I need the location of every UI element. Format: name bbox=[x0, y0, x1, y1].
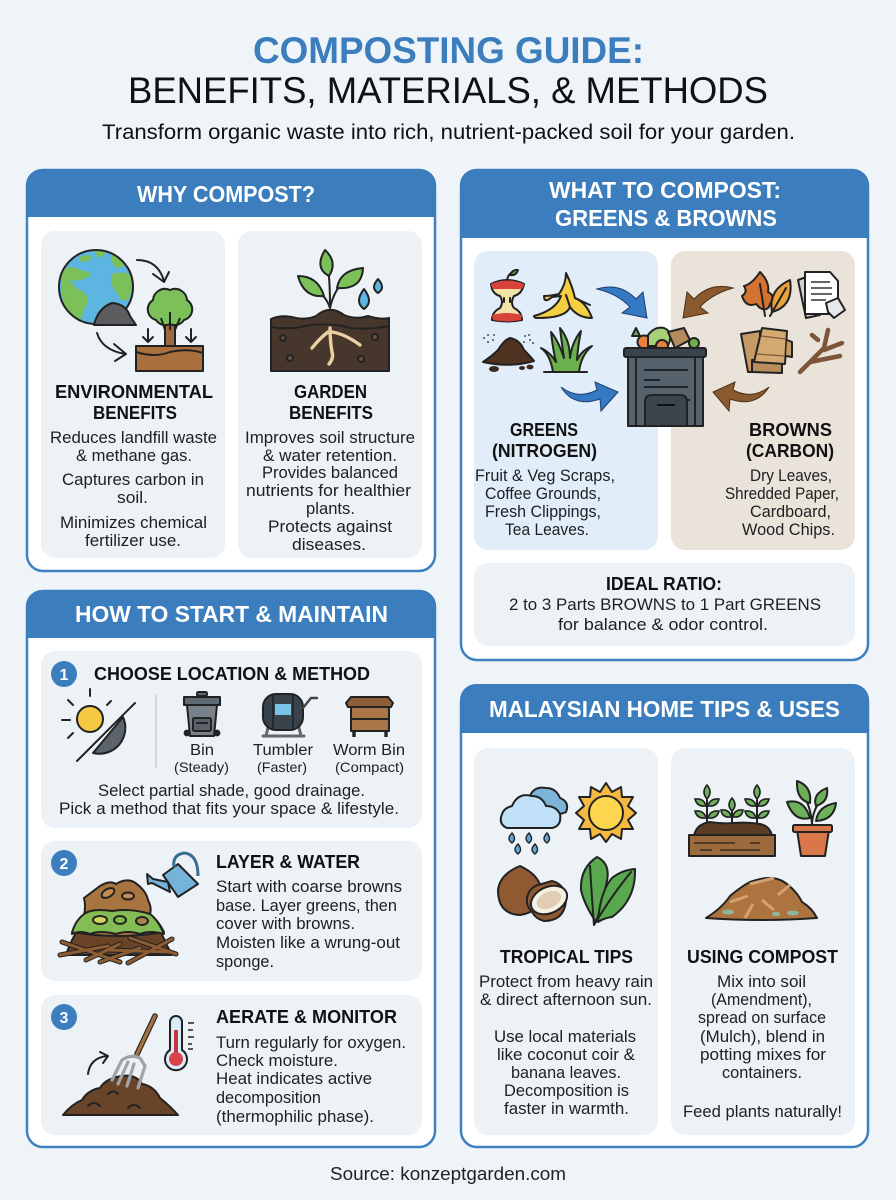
text: browns: BROWNS bbox=[749, 420, 832, 440]
text: using compost: USING COMPOST bbox=[687, 947, 838, 967]
heading: how to start bbox=[26, 590, 436, 638]
card: environmental benefits bbox=[41, 231, 225, 558]
heading: step 2: LAYER & WATER bbox=[216, 852, 360, 872]
text: browns bbox=[725, 420, 839, 539]
text: step 1: Select partial shade, good drainage. bbox=[98, 782, 365, 800]
text: tropical: Use local materials bbox=[494, 1028, 636, 1046]
text: garden list: diseases. bbox=[292, 536, 366, 554]
card: using compost bbox=[671, 748, 855, 1135]
text: browns: (CARBON) bbox=[746, 441, 834, 461]
text: greens: Coffee Grounds, bbox=[485, 485, 601, 503]
callout: ideal ratio bbox=[474, 563, 855, 646]
text: using compost: (Amendment), bbox=[711, 991, 812, 1009]
icon: apple core bbox=[491, 270, 524, 322]
title bbox=[128, 30, 768, 111]
icon: shredded paper bbox=[798, 272, 845, 318]
text: greens bbox=[475, 420, 615, 539]
panel: malaysian home tips bbox=[460, 684, 869, 1147]
text: using compost bbox=[683, 947, 842, 1121]
text: step 3: decomposition bbox=[216, 1089, 321, 1107]
text: step 3: Check moisture. bbox=[216, 1052, 338, 1070]
text: tropical: faster in warmth. bbox=[504, 1100, 629, 1118]
icon: seedling in soil bbox=[271, 250, 389, 371]
panel: what to compost bbox=[460, 169, 869, 660]
text: tropical: & direct afternoon sun. bbox=[480, 991, 652, 1009]
text: greens: GREENS bbox=[510, 420, 578, 440]
text: browns: Wood Chips. bbox=[742, 521, 835, 539]
card: browns bbox=[671, 251, 855, 550]
arrow: greens bottom bbox=[561, 382, 618, 411]
text: browns: Dry Leaves, bbox=[750, 467, 832, 485]
text: step 3: Heat indicates active bbox=[216, 1070, 372, 1088]
icon: tumbler bbox=[263, 694, 317, 736]
text: step 3 bbox=[216, 1034, 406, 1126]
text: greens: Fresh Clippings, bbox=[485, 503, 601, 521]
icon: thermometer bbox=[165, 1016, 194, 1070]
text: garden list: Provides balanced bbox=[262, 464, 398, 482]
arrow: greens top bbox=[597, 287, 647, 318]
text: step 2: Moisten like a wrung-out bbox=[216, 934, 400, 952]
heading: garden benefits bbox=[289, 382, 373, 423]
icon: pitchfork in compost bbox=[63, 1016, 178, 1115]
icon: potted plant bbox=[787, 781, 836, 856]
source line: Source: konzeptgarden.com bbox=[330, 1164, 566, 1184]
heading line: BENEFITS bbox=[93, 403, 177, 423]
heading: what to compost bbox=[460, 169, 869, 238]
text: using compost: Mix into soil bbox=[717, 973, 806, 991]
title: COMPOSTING GUIDE: bbox=[253, 30, 644, 71]
icon: bin bbox=[184, 692, 220, 736]
title: BENEFITS, MATERIALS, & METHODS bbox=[128, 70, 768, 111]
text: step 2: Start with coarse browns bbox=[216, 878, 402, 896]
text: garden list bbox=[245, 429, 415, 554]
badge 2 bbox=[51, 850, 77, 876]
heading: how to start: HOW TO START & MAINTAIN bbox=[75, 601, 388, 627]
text: greens: Tea Leaves. bbox=[505, 521, 589, 539]
heading: malaysian tips bbox=[460, 684, 869, 733]
text: step 1 bbox=[59, 782, 399, 818]
text: tropical: Decomposition is bbox=[504, 1082, 629, 1100]
heading: garden benefits: GARDEN bbox=[294, 382, 367, 402]
text: garden list: Improves soil structure bbox=[245, 429, 415, 447]
text: step 3: Turn regularly for oxygen. bbox=[216, 1034, 406, 1052]
text: garden list: & water retention. bbox=[263, 447, 397, 465]
labels: methods: Tumbler bbox=[253, 742, 313, 759]
labels: methods: (Compact) bbox=[335, 759, 404, 775]
panel: why compost bbox=[26, 169, 436, 571]
subtitle: Transform organic waste into rich, nutrient-packed soil for your garden. bbox=[102, 121, 795, 144]
text: browns: Cardboard, bbox=[750, 503, 831, 521]
icon: earth, tree and soil bbox=[59, 250, 203, 371]
text: garden list: Protects against bbox=[268, 518, 392, 536]
icon: grass bbox=[541, 328, 592, 372]
icon: layered compost pile bbox=[60, 880, 176, 963]
labels: methods: Bin bbox=[190, 742, 214, 759]
text: using compost: (Mulch), blend in bbox=[700, 1028, 825, 1046]
text: garden list: plants. bbox=[306, 500, 355, 518]
heading: what to compost: WHAT TO COMPOST: bbox=[549, 177, 781, 203]
badge 3 bbox=[51, 1004, 77, 1030]
icon: sun bbox=[576, 783, 636, 842]
text: using compost: potting mixes for bbox=[700, 1046, 827, 1064]
icon: cardboard bbox=[741, 328, 792, 373]
step 1 bbox=[41, 651, 422, 828]
text: environmental list: soil. bbox=[117, 489, 148, 507]
text: environmental list: Minimizes chemical bbox=[60, 514, 207, 532]
icon: rain cloud bbox=[501, 788, 567, 854]
arrow: browns bottom bbox=[713, 382, 769, 411]
icon: worm bin bbox=[346, 697, 393, 737]
text: environmental list: fertilizer use. bbox=[85, 532, 181, 550]
icon: sun and shade bbox=[62, 689, 135, 761]
heading: malaysian tips: MALAYSIAN HOME TIPS & USES bbox=[489, 696, 840, 722]
heading: what to compost: GREENS & BROWNS bbox=[555, 205, 777, 231]
heading: environmental benefits: ENVIRONMENTAL bbox=[55, 382, 213, 402]
text: environmental list: & methane gas. bbox=[76, 447, 192, 465]
text: tropical: like coconut coir & bbox=[497, 1046, 635, 1064]
text: step 2: cover with browns. bbox=[216, 915, 355, 933]
text: using compost: spread on surface bbox=[698, 1009, 826, 1027]
badge 1: 1 bbox=[60, 667, 69, 684]
text: tropical: TROPICAL TIPS bbox=[500, 947, 633, 967]
badge 1 bbox=[51, 661, 77, 687]
icon: mulch pile bbox=[706, 878, 817, 920]
step 3 bbox=[41, 995, 422, 1135]
divider bbox=[155, 695, 157, 768]
callout: ideal ratio: IDEAL RATIO: bbox=[606, 574, 722, 594]
callout: ideal ratio: 2 to 3 Parts BROWNS to 1 Part GREENS bbox=[509, 596, 821, 614]
step 2 bbox=[41, 841, 422, 981]
text: step 2 bbox=[216, 878, 402, 971]
heading: step 1: CHOOSE LOCATION & METHOD bbox=[94, 664, 370, 684]
arrow: browns top bbox=[683, 286, 733, 318]
labels: methods bbox=[174, 742, 405, 775]
card: tropical tips bbox=[474, 748, 658, 1135]
labels: methods: (Faster) bbox=[257, 759, 307, 775]
text: greens: Fruit & Veg Scraps, bbox=[475, 467, 615, 485]
icon: coffee grounds bbox=[483, 335, 534, 372]
icon: watering can bbox=[147, 853, 198, 897]
icon: banana peel bbox=[534, 273, 592, 318]
text: browns: Shredded Paper, bbox=[725, 485, 839, 503]
text: garden list: nutrients for healthier bbox=[246, 482, 412, 500]
icon: raised bed with plants bbox=[689, 785, 775, 856]
card: greens bbox=[474, 251, 658, 550]
text: step 2: sponge. bbox=[216, 953, 274, 971]
text: environmental list: Captures carbon in bbox=[62, 471, 204, 489]
panel: how to start and maintain bbox=[26, 590, 436, 1147]
text: step 2: base. Layer greens, then bbox=[216, 897, 397, 915]
icon: branch bbox=[800, 330, 842, 372]
callout: ideal ratio: for balance & odor control. bbox=[558, 616, 768, 634]
heading: why compost: WHY COMPOST? bbox=[137, 181, 315, 207]
text: step 3: (thermophilic phase). bbox=[216, 1108, 374, 1126]
heading: step 3: AERATE & MONITOR bbox=[216, 1007, 397, 1027]
icon: compost bin bbox=[624, 328, 706, 426]
icon: autumn leaves bbox=[742, 272, 791, 316]
text: step 1: Pick a method that fits your space & lifestyle. bbox=[59, 800, 399, 818]
text: environmental list bbox=[50, 429, 217, 550]
badge 3: 3 bbox=[60, 1010, 69, 1027]
text: tropical bbox=[479, 947, 653, 1118]
heading: why compost bbox=[26, 169, 436, 217]
heading: garden benefits: BENEFITS bbox=[289, 403, 373, 423]
labels: methods: Worm Bin bbox=[333, 742, 405, 759]
badge 2: 2 bbox=[60, 856, 69, 873]
text: tropical: Protect from heavy rain bbox=[479, 973, 653, 991]
labels: methods: (Steady) bbox=[174, 759, 229, 775]
text: using compost: Feed plants naturally! bbox=[683, 1103, 842, 1121]
text: tropical: banana leaves. bbox=[511, 1064, 621, 1082]
text: using compost: containers. bbox=[722, 1064, 802, 1082]
card: garden benefits bbox=[238, 231, 422, 558]
text: environmental list: Reduces landfill waste bbox=[50, 429, 217, 447]
text: greens: (NITROGEN) bbox=[492, 441, 597, 461]
icon: banana leaves bbox=[581, 857, 635, 925]
icon: coconut bbox=[498, 866, 572, 921]
